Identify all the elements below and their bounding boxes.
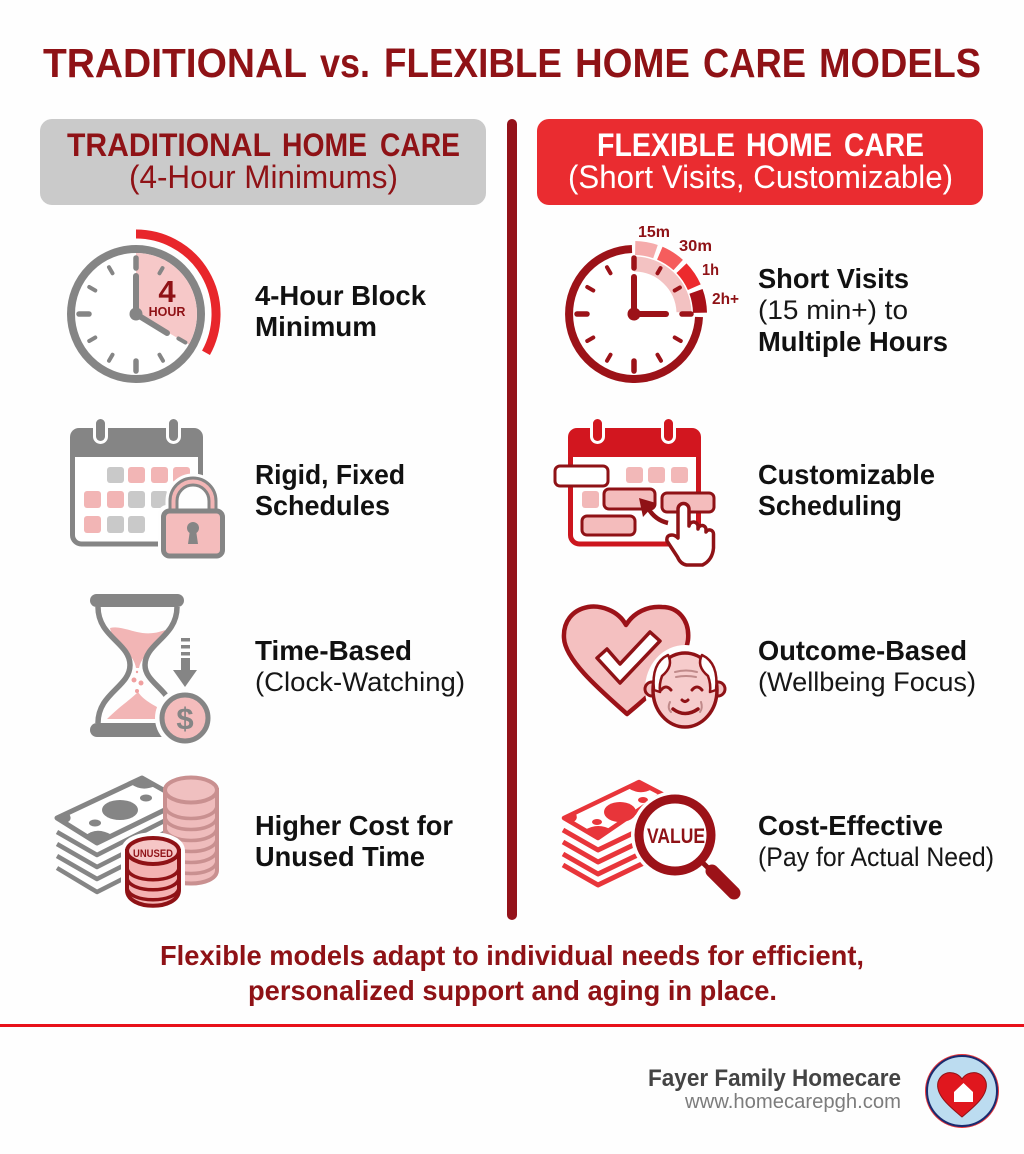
label: time-based: (Clock-Watching)	[255, 667, 465, 697]
panel: traditional header	[40, 119, 486, 205]
conclusion text: Flexible models adapt to individual needs for efficient,	[160, 940, 864, 971]
label: rigid schedules: Rigid, Fixed	[255, 459, 405, 490]
footer rule	[0, 1024, 1024, 1027]
label: 4-hour block: Minimum	[255, 311, 377, 342]
label: cost-effective: Cost-Effective	[758, 810, 943, 841]
title: TRADITIONAL	[43, 40, 307, 86]
label: 4-hour block	[255, 280, 426, 342]
icon: flexible clock: 2h+	[712, 291, 739, 308]
label: 4-hour block: 4-Hour Block	[255, 280, 426, 311]
icon: flexible clock: 15m	[638, 224, 670, 241]
label: rigid schedules: Schedules	[255, 490, 390, 521]
icon: 4-hour clock: HOUR	[149, 305, 185, 319]
title: MODELS	[819, 40, 981, 86]
icon: flexible clock	[569, 224, 739, 379]
label: short visits: Multiple Hours	[758, 326, 948, 357]
footer brand text	[648, 1065, 901, 1113]
label: customizable scheduling	[758, 459, 935, 521]
title	[43, 40, 981, 86]
footer brand text: www.homecarepgh.com	[684, 1091, 901, 1113]
panel: traditional header: CARE	[380, 127, 460, 163]
label: customizable scheduling: Customizable	[758, 459, 935, 490]
label: higher cost: Unused Time	[255, 841, 425, 872]
icon: cash and value magnifier	[563, 782, 735, 894]
icon: flexible clock: 1h	[702, 262, 719, 279]
title: vs.	[320, 40, 370, 86]
icon: 4-hour clock	[71, 234, 216, 379]
icon: 4-hour clock: 4	[158, 274, 176, 309]
icon: cash stack and unused coins: UNUSED	[133, 848, 173, 860]
panel: flexible header: FLEXIBLE	[597, 127, 735, 163]
label: rigid schedules	[255, 459, 405, 521]
label: customizable scheduling: Scheduling	[758, 490, 902, 521]
label: time-based	[255, 635, 465, 697]
label: higher cost	[255, 810, 453, 872]
panel: flexible header: (Short Visits, Customizable)	[568, 159, 953, 195]
title: CARE	[703, 40, 806, 86]
panel: traditional header: (4-Hour Minimums)	[129, 159, 398, 195]
panel: flexible header: CARE	[844, 127, 924, 163]
icon: cash and value magnifier: VALUE	[647, 825, 705, 848]
icon: customizable calendar	[555, 419, 714, 565]
footer brand text: Fayer Family Homecare	[648, 1065, 901, 1092]
label: higher cost: Higher Cost for	[255, 810, 453, 841]
center divider	[507, 119, 517, 920]
icon: hourglass with dollar coin	[90, 594, 215, 748]
icon: hourglass with dollar coin: $	[176, 701, 194, 736]
label: time-based: Time-Based	[255, 635, 412, 666]
title: FLEXIBLE	[384, 40, 562, 86]
icon: heart with check and senior face	[564, 607, 725, 733]
icon: cash stack and unused coins	[57, 778, 217, 910]
icon: logo	[925, 1054, 999, 1128]
label: short visits: (15 min+) to	[758, 295, 908, 325]
label: cost-effective	[758, 810, 994, 872]
panel: flexible header: HOME	[746, 127, 832, 163]
icon: locked calendar	[70, 419, 228, 560]
conclusion text	[160, 940, 864, 1006]
conclusion text: personalized support and aging in place.	[248, 975, 777, 1006]
title: HOME	[575, 40, 690, 86]
panel: traditional header: HOME	[282, 127, 367, 163]
label: cost-effective: (Pay for Actual Need)	[758, 842, 994, 872]
panel: traditional header: TRADITIONAL	[67, 127, 271, 163]
panel: flexible header	[537, 119, 983, 205]
label: outcome-based	[758, 635, 976, 697]
label: short visits: Short Visits	[758, 263, 909, 294]
label: outcome-based: (Wellbeing Focus)	[758, 667, 976, 697]
icon: flexible clock: 30m	[679, 238, 712, 255]
label: outcome-based: Outcome-Based	[758, 635, 967, 666]
label: short visits	[758, 263, 948, 357]
